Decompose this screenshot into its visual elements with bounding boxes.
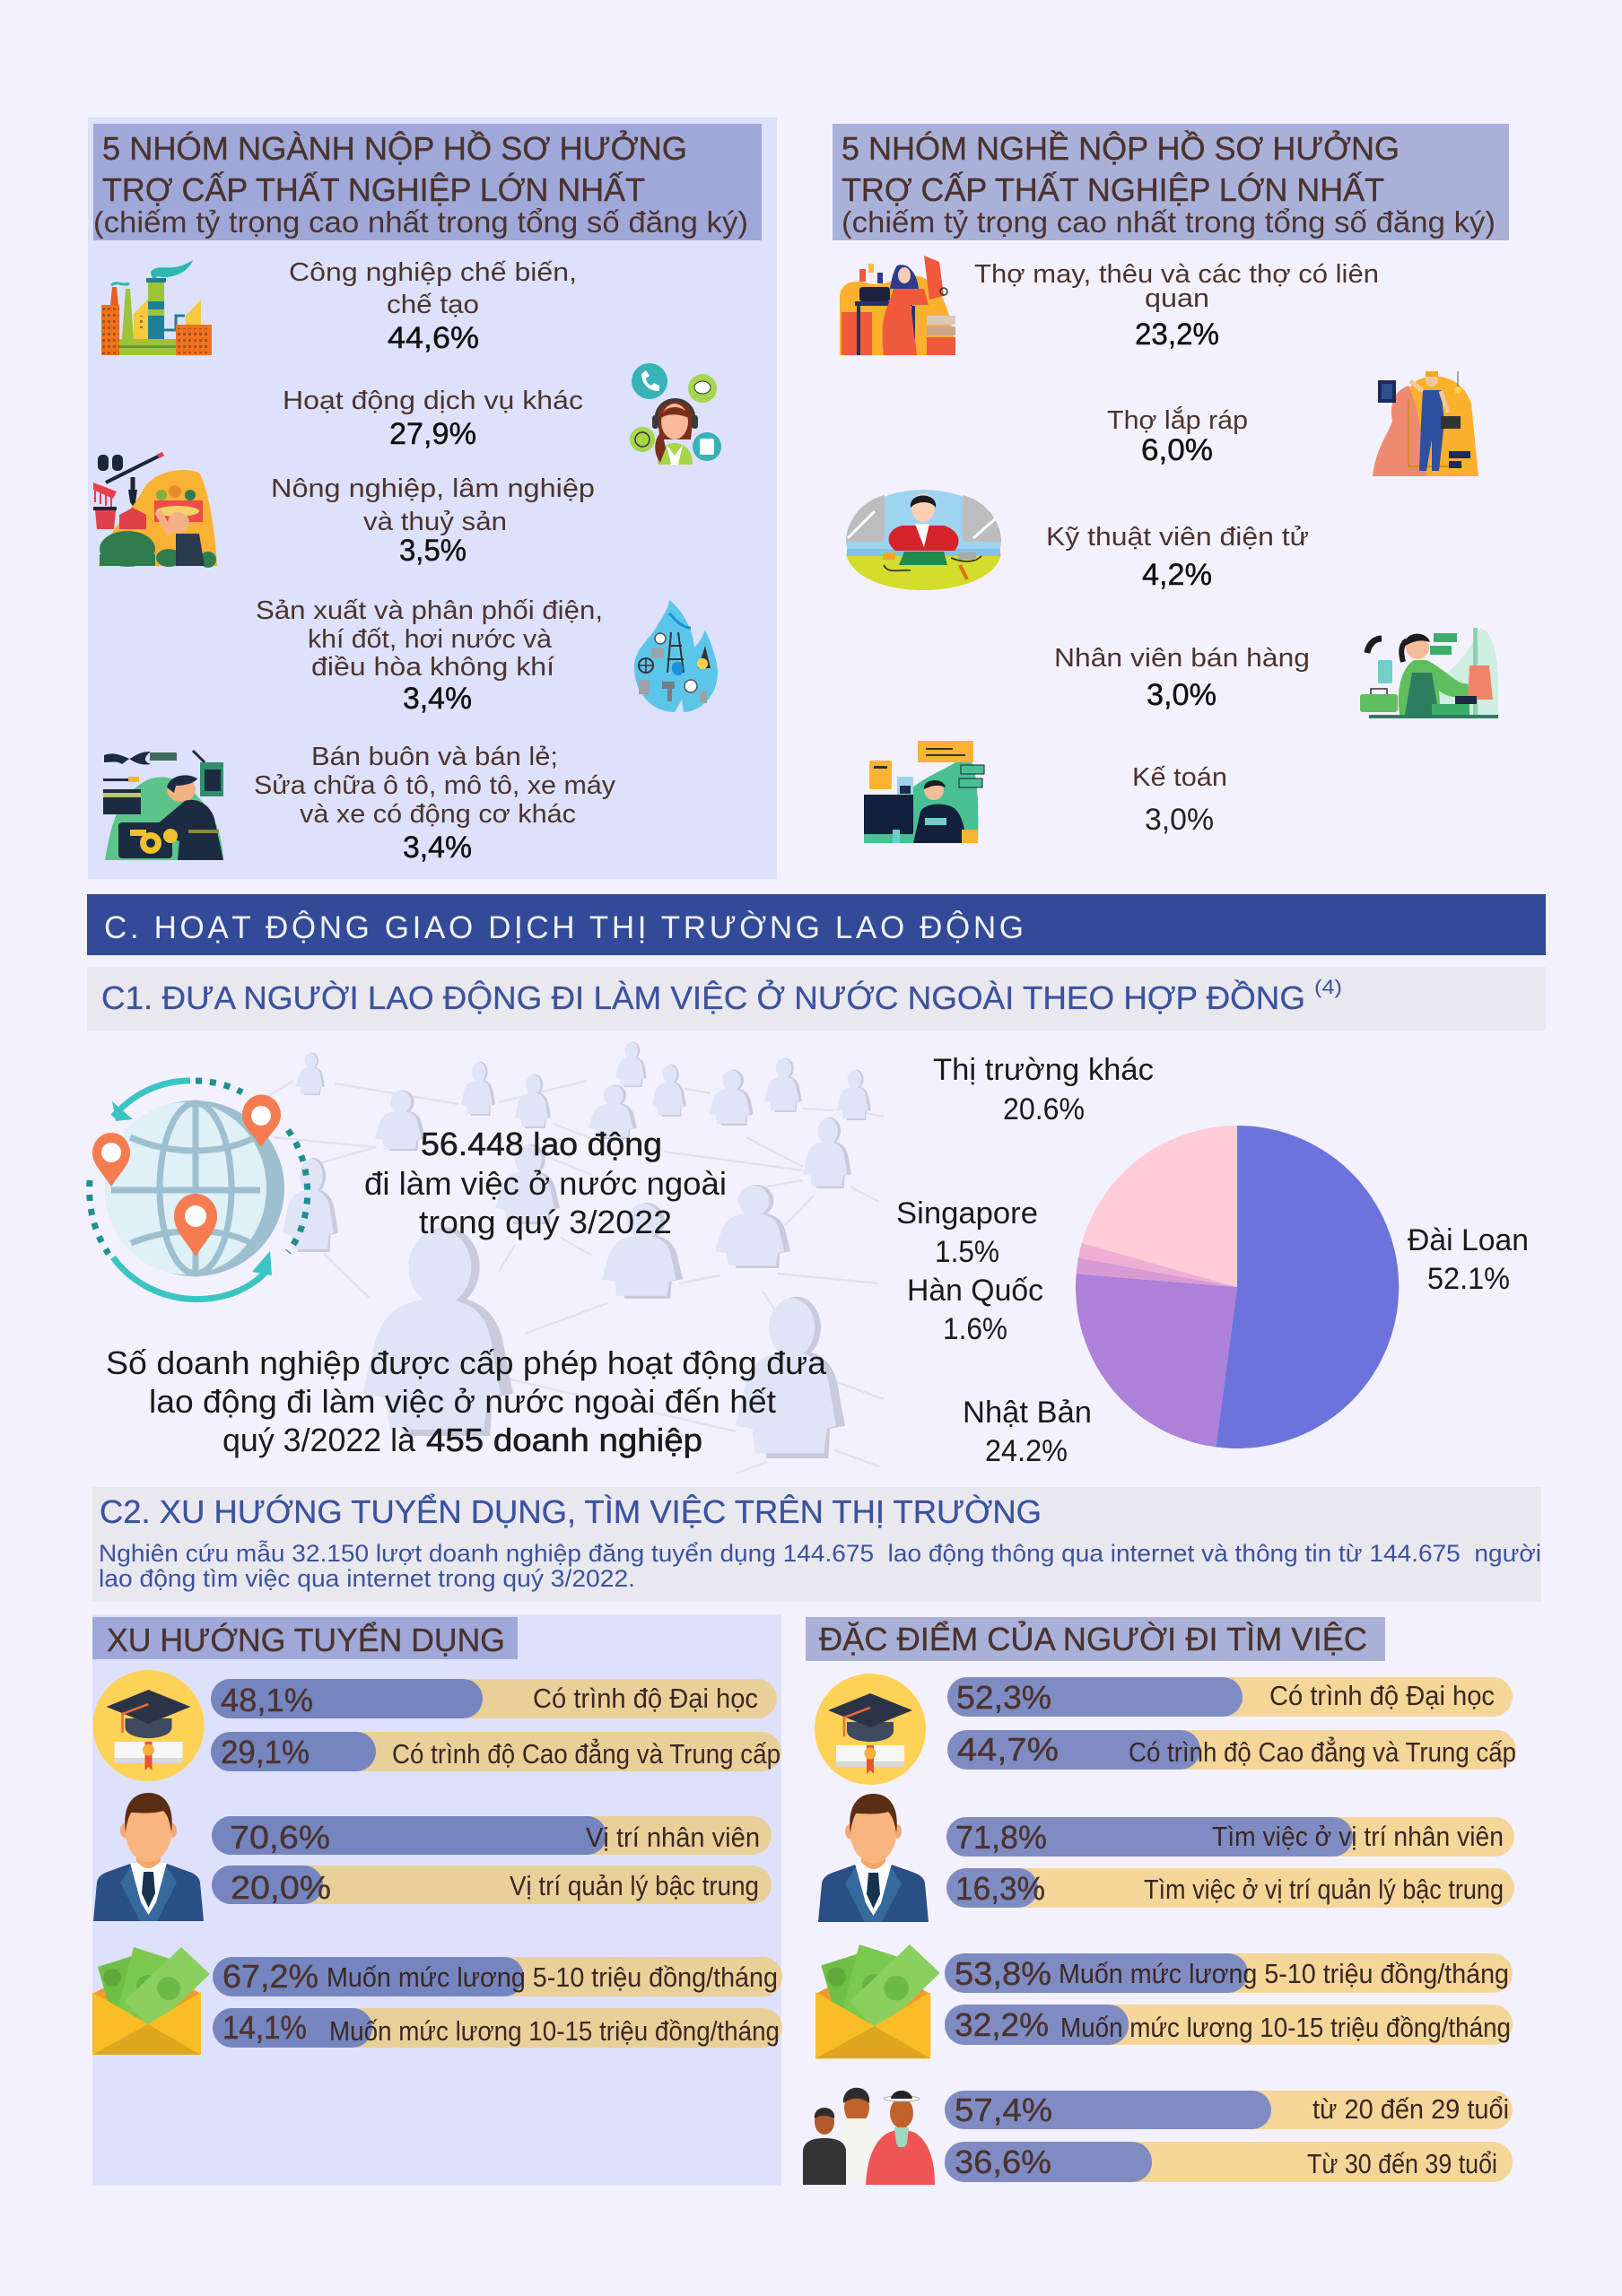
label: thị trường khác: Thị trường khác (933, 1053, 1154, 1087)
icon: three people (803, 2088, 935, 2185)
icon: graduation (815, 1674, 926, 1785)
label: hàn quốc: 1.6% (943, 1312, 1007, 1346)
section heading: C1 (87, 967, 1546, 1031)
label: singapore: Singapore (896, 1196, 1038, 1231)
bar: đại học 48,1%: Có trình độ Đại học (533, 1683, 758, 1714)
label: nhật bản (963, 1396, 1092, 1468)
bar: lương 10-15 14,1% (213, 2008, 782, 2048)
bar: tuổi 20-29 57,4% (945, 2091, 1513, 2129)
item: nhân viên bán hàng (1054, 644, 1310, 712)
item: thợ lắp ráp: Thợ lắp ráp (1107, 405, 1248, 435)
item: bán buôn và bán lẻ: và xe có động cơ khác (300, 800, 576, 829)
label: singapore (896, 1196, 1038, 1269)
bar: nhân viên 70,6%: Vị trí nhân viên (586, 1822, 760, 1853)
bar: đại học 52,3%: Có trình độ Đại học (1269, 1680, 1495, 1711)
icon: energy flame (634, 600, 718, 712)
heading: 5 nhóm nghề: 5 NHÓM NGHỀ NỘP HỒ SƠ HƯỞNG (842, 129, 1400, 167)
bar: lương 5-10 67,2%: 67,2% (222, 1958, 318, 1995)
text: study description (99, 1539, 1541, 1592)
text: workers abroad (364, 1126, 727, 1240)
bar: lương 5-10 67,2% (213, 1957, 782, 1996)
heading: xu hướng tuyển dụng: XU HƯỚNG TUYỂN DỤNG (107, 1621, 505, 1658)
bar: quản lý 20,0%: 20,0% (231, 1869, 331, 1906)
bar: đại học 48,1% (211, 1679, 777, 1718)
item: nông nghiệp, lâm nghiệp: Nông nghiệp, lâm nghiệp (271, 474, 595, 503)
bar: cao đẳng 44,7%: Có trình độ Cao đẳng và Trung cấp (1129, 1735, 1516, 1768)
icon: businessman (818, 1794, 929, 1922)
bar: nhân viên 71,8% (946, 1817, 1514, 1857)
item: nông nghiệp, lâm nghiệp: và thuỷ sản (363, 508, 507, 536)
item: kế toán: Kế toán (1132, 763, 1227, 792)
icon: mechanic (103, 751, 223, 860)
item: nhân viên bán hàng: Nhân viên bán hàng (1054, 644, 1310, 673)
text: licensed enterprises: quý 3/2022 là (222, 1422, 416, 1458)
icon: farmer (93, 454, 217, 568)
item: hoạt động dịch vụ khác: Hoạt động dịch vụ khác (283, 387, 583, 415)
heading: 5 nhóm nghề (833, 124, 1509, 240)
item: thợ lắp ráp: 6,0% (1141, 433, 1213, 467)
item: thợ may (974, 260, 1379, 352)
icon: assembler (1373, 371, 1478, 476)
bar: cao đẳng 44,7%: 44,7% (957, 1731, 1059, 1768)
text: licensed enterprises (106, 1344, 827, 1458)
bar: đại học 52,3%: 52,3% (956, 1679, 1051, 1716)
icon: seamstress (840, 256, 955, 355)
label: đài loan: Đài Loan (1408, 1223, 1529, 1257)
item: sản xuất và phân phối điện: điều hòa không khí (311, 653, 554, 682)
label: đài loan: 52.1% (1427, 1262, 1510, 1296)
icon: factory (101, 260, 212, 355)
item: sản xuất và phân phối điện: Sản xuất và phân phối điện, (256, 596, 603, 625)
heading: 5 nhóm nghề: (chiếm tỷ trọng cao nhất trong tổng số đăng ký) (842, 205, 1496, 239)
heading: đặc điểm người tìm việc: ĐẶC ĐIỂM CỦA NGƯỜI ĐI TÌM VIỆC (819, 1620, 1367, 1657)
icon: pin bottom (174, 1194, 217, 1257)
panel: xu hướng tuyển dụng (92, 1614, 782, 2186)
icon: pin left (92, 1133, 130, 1187)
section banner: C (87, 894, 1546, 955)
icon: call center agent (630, 363, 721, 465)
text: workers abroad: đi làm việc ở nước ngoài (364, 1165, 727, 1202)
heading: 5 nhóm ngành (93, 124, 762, 240)
item: thợ lắp ráp (1107, 405, 1248, 467)
bar: nhân viên 70,6%: 70,6% (230, 1819, 330, 1856)
text: licensed enterprises: Số doanh nghiệp được cấp phép hoạt động đưa (106, 1344, 827, 1381)
bar: lương 5-10 53,8%: Muốn mức lương 5-10 triệu đồng/tháng (1059, 1958, 1509, 1989)
text: study description: lao động tìm việc qua internet trong quý 3/2022. (99, 1565, 635, 1592)
item: nông nghiệp, lâm nghiệp: 3,5% (399, 534, 467, 568)
text: study description: Nghiên cứu mẫu 32.150 lượt doanh nghiệp đăng tuyển dụng 144.675 lao động thông qua internet và thông tin từ 144.675 người (99, 1539, 1541, 1567)
bar: lương 10-15 14,1%: 14,1% (222, 2009, 307, 2046)
icon: saleswoman (1360, 628, 1498, 718)
item: công nghiệp chế biến: 44,6% (388, 321, 479, 355)
bar: nhân viên 71,8%: 71,8% (955, 1819, 1047, 1856)
panel: đặc điểm người tìm việc (803, 1617, 1516, 2185)
item: công nghiệp chế biến: Công nghiệp chế biến, (289, 258, 577, 287)
item: công nghiệp chế biến (289, 258, 577, 355)
bar: lương 10-15 14,1%: Muốn mức lương 10-15 triệu đồng/tháng (329, 2015, 780, 2047)
bar: nhân viên 70,6% (212, 1816, 772, 1856)
bar: lương 10-15 32,2%: Muốn mức lương 10-15 triệu đồng/tháng (1060, 2012, 1511, 2043)
label: thị trường khác: 20.6% (1003, 1092, 1085, 1126)
item: thợ may: quan (1145, 284, 1209, 313)
icon: globe with pins and arrows (90, 1081, 308, 1300)
section heading: C1: C1. ĐƯA NGƯỜI LAO ĐỘNG ĐI LÀM VIỆC Ở NƯỚC NGOÀI THEO HỢP ĐỒNG (101, 978, 1305, 1016)
item: sản xuất và phân phối điện: khí đốt, hơi nước và (308, 625, 553, 654)
text: licensed enterprises: 455 doanh nghiệp (426, 1422, 702, 1458)
label: hàn quốc (907, 1274, 1043, 1346)
item: hoạt động dịch vụ khác: 27,9% (389, 417, 476, 451)
label: đài loan (1408, 1223, 1529, 1296)
item: hoạt động dịch vụ khác (283, 387, 583, 451)
bar: lương 10-15 32,2% (945, 2005, 1513, 2045)
label: hàn quốc: Hàn Quốc (907, 1274, 1043, 1308)
label: singapore: 1.5% (935, 1235, 999, 1269)
bar: tuổi 30-39 36,6% (945, 2142, 1513, 2182)
item: thợ may: Thợ may, thêu và các thợ có liên (974, 260, 1379, 289)
pie chart: thị trường (896, 1053, 1529, 1468)
label: nhật bản: 24.2% (985, 1434, 1068, 1468)
item: nông nghiệp, lâm nghiệp (271, 474, 595, 568)
item: sản xuất và phân phối điện: 3,4% (403, 682, 472, 716)
bar: cao đẳng 29,1%: 29,1% (221, 1734, 310, 1770)
item: bán buôn và bán lẻ: Bán buôn và bán lẻ; (311, 743, 558, 771)
panel: 5 nhóm ngành (88, 117, 777, 879)
icon: businessman (93, 1793, 204, 1921)
bar: cao đẳng 29,1% (211, 1732, 781, 1771)
section banner: C: C. HOẠT ĐỘNG GIAO DỊCH THỊ TRƯỜNG LAO ĐỘNG (104, 909, 1024, 945)
item: kế toán (1132, 763, 1227, 837)
text: workers abroad: 56.448 lao động (421, 1126, 662, 1162)
icon: electronics technician (846, 490, 1001, 590)
label: thị trường khác (933, 1053, 1154, 1126)
text: workers abroad: trong quý 3/2022 (419, 1204, 672, 1240)
label: nhật bản: Nhật Bản (963, 1396, 1092, 1430)
icon: accountant (864, 741, 984, 843)
bar: quản lý 16,3%: 16,3% (955, 1870, 1045, 1907)
item: kỹ thuật viên điện tử (1046, 523, 1309, 592)
item: nhân viên bán hàng: 3,0% (1147, 678, 1216, 712)
heading: 5 nhóm nghề: TRỢ CẤP THẤT NGHIỆP LỚN NHẤT (842, 171, 1384, 208)
item: kỹ thuật viên điện tử: 4,2% (1142, 558, 1212, 592)
bar: lương 5-10 53,8% (945, 1953, 1513, 1993)
bar: lương 10-15 32,2%: 32,2% (955, 2006, 1049, 2043)
bar: quản lý 16,3%: Tìm việc ở vị trí quản lý bậc trung (1144, 1874, 1504, 1905)
section heading: C2 (92, 1487, 1541, 1602)
item: công nghiệp chế biến: chế tạo (387, 291, 479, 319)
bar: đại học 48,1%: 48,1% (221, 1682, 313, 1718)
item: bán buôn và bán lẻ (254, 743, 616, 865)
icon: money envelope (815, 1944, 940, 2058)
icon: money envelope (92, 1947, 210, 2055)
heading: 5 nhóm ngành: (chiếm tỷ trọng cao nhất trong tổng số đăng ký) (93, 205, 748, 239)
text: licensed enterprises: lao động đi làm việc ở nước ngoài đến hết (149, 1383, 776, 1420)
bar: tuổi 20-29 57,4%: 57,4% (955, 2092, 1052, 2128)
icon: graduation (93, 1670, 205, 1781)
bar: lương 5-10 53,8%: 53,8% (955, 1955, 1051, 1992)
bar: tuổi 30-39 36,6%: Từ 30 đến 39 tuổi (1307, 2148, 1497, 2179)
panel: 5 nhóm nghề (833, 124, 1509, 843)
item: kế toán: 3,0% (1145, 803, 1214, 837)
bar: tuổi 20-29 57,4%: từ 20 đến 29 tuổi (1312, 2093, 1509, 2125)
item: sản xuất và phân phối điện (256, 596, 603, 716)
item: kỹ thuật viên điện tử: Kỹ thuật viên điện tử (1046, 523, 1309, 552)
section heading: C1: (4) (1314, 976, 1342, 998)
item: bán buôn và bán lẻ: 3,4% (403, 831, 472, 865)
item: thợ may: 23,2% (1135, 317, 1219, 352)
bar: quản lý 20,0%: Vị trí quản lý bậc trung (510, 1870, 759, 1901)
heading: 5 nhóm ngành: TRỢ CẤP THẤT NGHIỆP LỚN NHẤT (102, 171, 645, 208)
background: people network (267, 1042, 884, 1474)
bar: đại học 52,3% (947, 1677, 1513, 1717)
icon: pin right (242, 1094, 281, 1147)
item: bán buôn và bán lẻ: Sửa chữa ô tô, mô tô, xe máy (254, 771, 616, 800)
bar: cao đẳng 44,7% (947, 1730, 1516, 1770)
bar: cao đẳng 29,1%: Có trình độ Cao đẳng và Trung cấp (392, 1737, 780, 1770)
bar: lương 5-10 67,2%: Muốn mức lương 5-10 triệu đồng/tháng (327, 1961, 778, 1993)
bar: quản lý 20,0% (212, 1866, 772, 1906)
heading: 5 nhóm ngành: 5 NHÓM NGÀNH NỘP HỒ SƠ HƯỞNG (102, 129, 687, 167)
section heading: C2: C2. XU HƯỚNG TUYỂN DỤNG, TÌM VIỆC TRÊN THỊ TRƯỜNG (100, 1492, 1042, 1530)
bar: quản lý 16,3% (946, 1868, 1514, 1908)
bar: tuổi 30-39 36,6%: 36,6% (955, 2144, 1051, 2180)
bar: nhân viên 71,8%: Tìm việc ở vị trí nhân viên (1212, 1821, 1504, 1852)
